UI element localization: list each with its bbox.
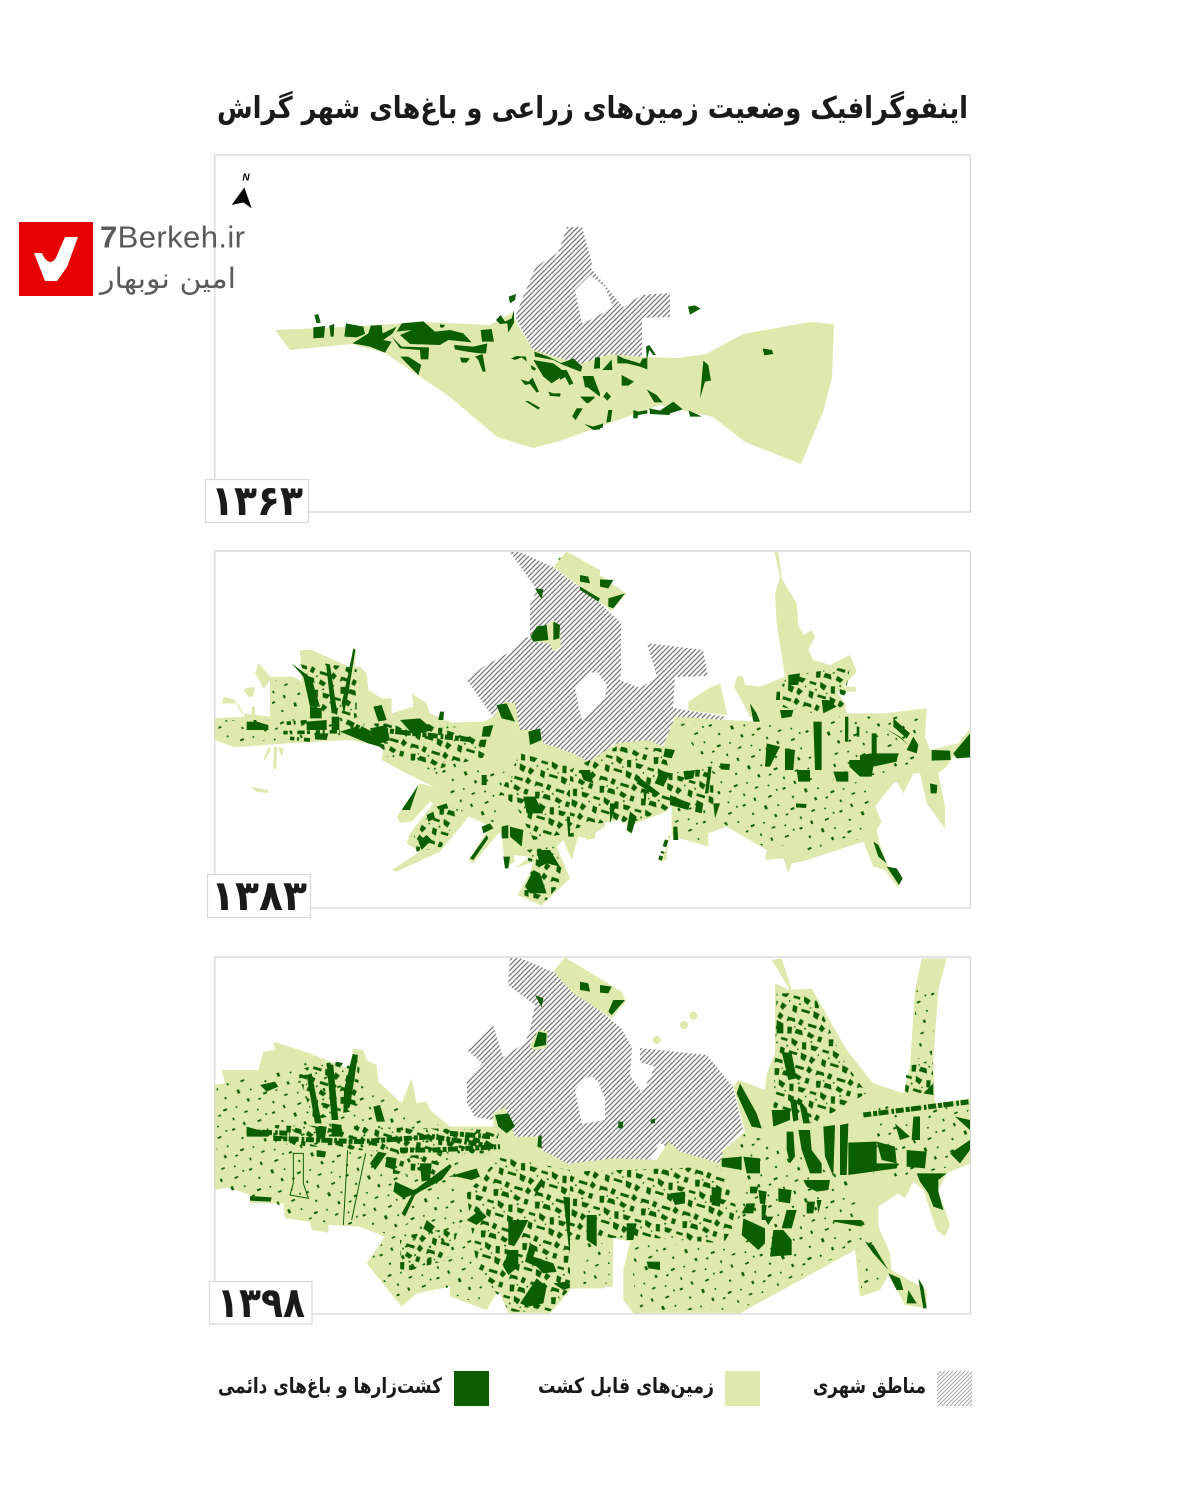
legend item: permanent orchards <box>218 1371 489 1406</box>
logo: 7Berkeh brand block <box>19 220 245 296</box>
permanent orchards west 1398 <box>217 960 605 1312</box>
farmland 1363 <box>275 312 834 464</box>
farmland west 1398 <box>215 957 605 1313</box>
legend item: arable land: زمین‌های قابل کشت <box>538 1374 714 1398</box>
logo: author name: امین نوبهار <box>98 262 236 295</box>
legend item: urban areas <box>813 1371 972 1406</box>
permanent orchards east 1363 <box>560 305 773 430</box>
permanent orchards east 1383 <box>570 575 970 885</box>
farmland west 1383 <box>215 552 605 906</box>
permanent orchards east 1398 <box>570 982 970 1310</box>
permanent orchards west 1363 <box>313 294 600 430</box>
north arrow: N <box>242 173 250 184</box>
legend <box>218 1371 972 1406</box>
farmland east 1398 <box>553 957 970 1313</box>
north arrow <box>232 173 252 208</box>
urban area 1383 <box>467 552 727 770</box>
panel: map 1398 <box>215 957 970 1314</box>
urban area 1363 <box>515 227 670 367</box>
panel: map 1363 <box>215 155 970 512</box>
title: اینفوگرافیک وضعیت زمین‌های زراعی و باغ‌های شهر گراش <box>217 90 968 126</box>
year label 1398: ۱۳۹۸ <box>217 1278 305 1327</box>
year label 1383: ۱۳۸۳ <box>211 871 307 920</box>
logo: red square with check mark <box>19 222 93 296</box>
legend item: permanent orchards: کشت‌زارها و باغ‌های دائمی <box>218 1374 443 1398</box>
permanent orchards west 1383 <box>217 557 600 903</box>
legend item: urban areas: مناطق شهری <box>813 1374 926 1398</box>
year label 1363: ۱۳۶۳ <box>211 476 303 525</box>
panel: map 1383 <box>215 551 970 908</box>
farmland east 1383 <box>553 552 970 888</box>
urban area 1398 <box>467 958 743 1175</box>
legend item: arable land <box>538 1371 760 1406</box>
logo: site name: 7Berkeh.ir <box>100 220 245 254</box>
